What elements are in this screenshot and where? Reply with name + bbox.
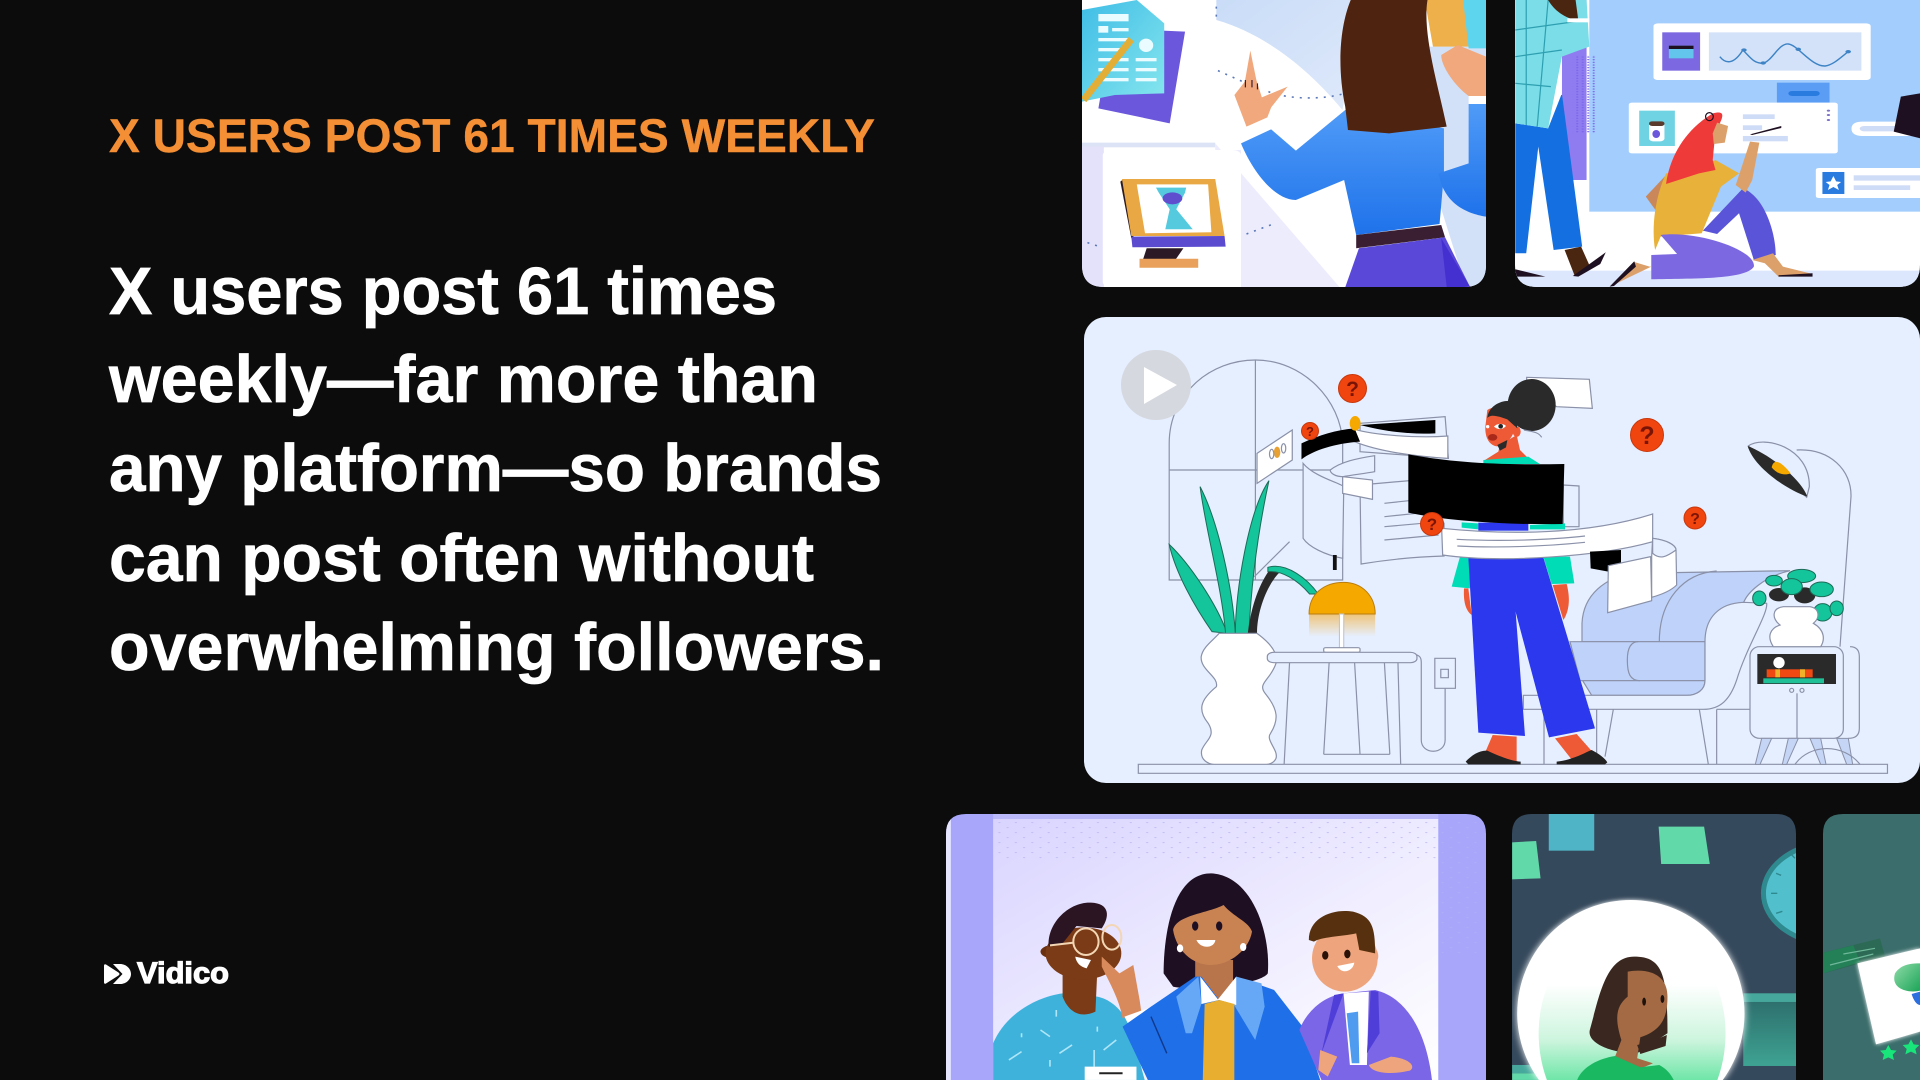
question badge 1: ? <box>1346 378 1359 401</box>
panel: woman with questions in living room <box>1084 317 1920 783</box>
icon: wall clock <box>1761 848 1796 939</box>
icon: play logo mark <box>104 964 131 984</box>
icon: green stars <box>1880 1039 1919 1060</box>
sofa <box>1523 571 1790 764</box>
side cabinet with plant <box>1750 569 1860 764</box>
side pill and clipboard <box>1851 93 1920 138</box>
logo: Vidico <box>104 957 229 990</box>
icon: documents and pencil <box>1082 0 1185 123</box>
desk <box>1512 993 1797 1080</box>
dotted connector lines <box>1087 7 1342 247</box>
main statement text: X users post 61 times <box>109 254 777 329</box>
plant and vase <box>1169 481 1318 765</box>
panel: rating card on teal background <box>1823 814 1920 1080</box>
glowing oval <box>1517 900 1745 1080</box>
illustration: kneeling woman with red hair <box>1610 112 1813 287</box>
star card <box>1816 168 1920 198</box>
question badge 5 <box>1420 512 1444 536</box>
illustration: man in purple suit <box>1299 911 1432 1080</box>
question badge 2 <box>1302 422 1318 440</box>
papers behind woman, left <box>1257 416 1448 570</box>
table lamp and side table <box>1267 582 1455 764</box>
white rating card <box>1857 948 1920 1044</box>
arched window <box>1169 360 1343 580</box>
main statement text: weekly—far more than <box>108 342 818 417</box>
chart card <box>1653 23 1871 103</box>
sticky notes <box>1512 814 1710 879</box>
question badge 2: ? <box>1306 424 1314 439</box>
question badge 5: ? <box>1427 515 1437 534</box>
main statement text: can post often without <box>109 521 814 596</box>
question mark badges <box>1302 374 1706 536</box>
illustration: standing person <box>1515 0 1606 277</box>
floor lamp <box>1748 442 1851 647</box>
panel: dashboard wall with kneeling woman <box>1515 0 1920 287</box>
panel: three people in a team <box>946 813 1486 1080</box>
illustration: woman from behind <box>1234 0 1486 287</box>
question badge 3 <box>1630 418 1664 452</box>
panel: woman in glowing circle on dark wall <box>1512 814 1796 1080</box>
logo wordmark: Vidico <box>137 957 229 990</box>
main statement text: overwhelming followers. <box>109 610 884 685</box>
small message card <box>1823 938 1885 973</box>
floor shelf <box>1138 764 1887 773</box>
question badge 4 <box>1684 507 1706 529</box>
illustration: woman in blue jacket <box>1123 873 1320 1080</box>
eyebrow heading: X USERS POST 61 TIMES WEEKLY <box>109 109 875 162</box>
question badge 1 <box>1338 374 1366 402</box>
question badge 3: ? <box>1639 422 1655 450</box>
main statement text: any platform—so brands <box>109 431 882 506</box>
mug card <box>1629 103 1838 153</box>
illustration: woman holding papers <box>1408 377 1677 764</box>
panel: woman pointing at documents <box>1082 0 1486 287</box>
icon: play button <box>1121 350 1191 420</box>
question badge 4: ? <box>1690 511 1700 528</box>
illustration: man with glasses <box>993 903 1151 1080</box>
main statement text <box>108 254 884 685</box>
icon: hourglass monitor <box>1120 179 1226 263</box>
illustration: woman portrait <box>1577 957 1674 1080</box>
